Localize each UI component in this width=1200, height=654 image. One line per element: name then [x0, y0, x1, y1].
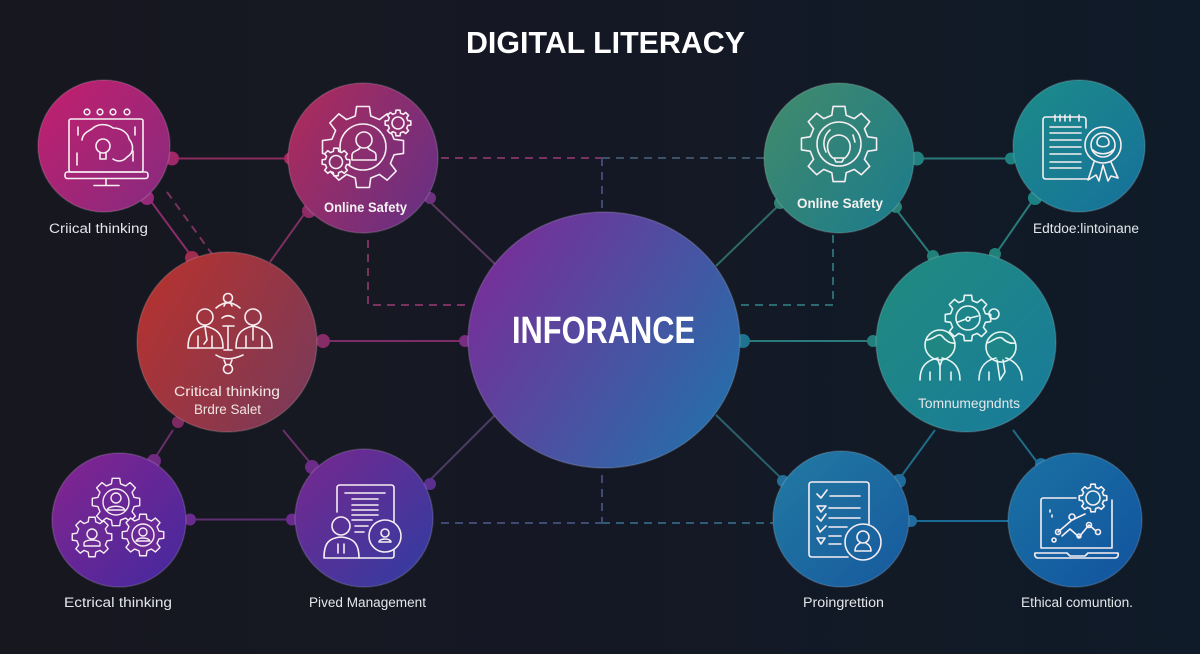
icon: laptop with chart and gear	[1035, 484, 1118, 558]
icon: people with gear	[920, 295, 1022, 380]
panel: online safety left	[288, 83, 438, 233]
connectors: right network	[716, 158, 1037, 521]
icon: team discussion	[188, 294, 272, 374]
label: Criical thinking	[49, 221, 148, 236]
label: Pived Management	[309, 595, 426, 610]
label: Ectrical thinking	[64, 595, 172, 610]
panel: certificate	[1013, 80, 1145, 236]
icon: laptop with lightbulb	[65, 109, 148, 186]
icon: notebook and award	[1043, 115, 1121, 181]
label: Online Safety	[324, 200, 407, 215]
connector nodes	[140, 152, 1047, 527]
icon: gear with bulb	[801, 106, 877, 182]
panel: online safety right	[764, 83, 914, 233]
label: Online Safety	[797, 196, 883, 211]
title: DIGITAL LITERACY	[466, 25, 745, 60]
panel: ethical laptop	[1008, 453, 1142, 610]
panel: checklist	[773, 451, 909, 610]
icon: gears with person	[322, 106, 411, 188]
icon: checklist and person	[809, 482, 881, 560]
icon: document and person	[324, 485, 401, 558]
panel: critical thinking team: Brdre Salet	[194, 402, 261, 417]
labels: Critical thinking	[174, 384, 280, 399]
label: Tomnumegndnts	[918, 396, 1020, 411]
connectors: left network	[150, 158, 773, 523]
icon: three gears with people	[72, 478, 164, 557]
central label: INFORANCE	[512, 310, 695, 352]
panel: central node	[468, 212, 740, 468]
label: Proingrettion	[803, 595, 884, 610]
panel: pived management	[295, 449, 433, 610]
label: Ethical comuntion.	[1021, 595, 1133, 610]
panel: tomnumegndnts	[876, 252, 1056, 432]
panel: ethical thinking gears	[52, 453, 186, 610]
label: Edtdoe:lintoinane	[1033, 221, 1139, 236]
panel: critical thinking team	[137, 252, 317, 432]
panel: critical thinking laptop	[38, 80, 170, 236]
